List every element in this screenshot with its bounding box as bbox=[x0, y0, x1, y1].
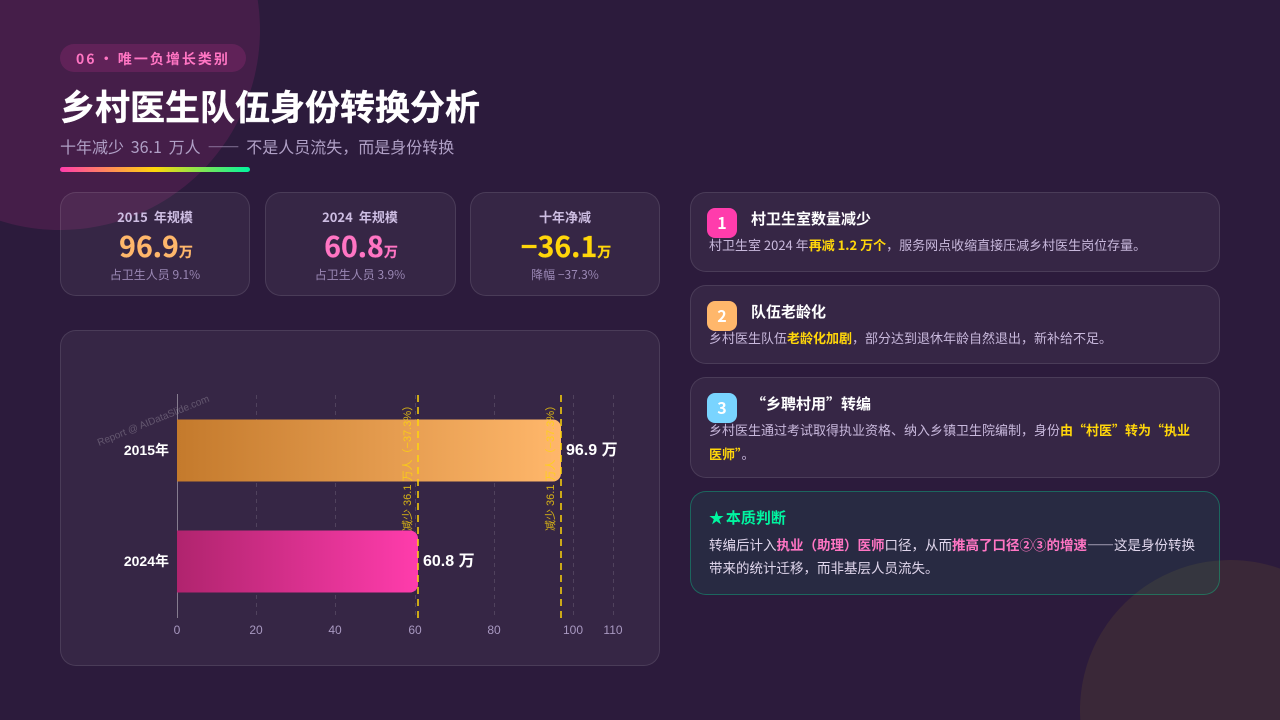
category labels bbox=[124, 442, 169, 569]
x axis labels: 110 bbox=[603, 623, 623, 637]
text 2: 乡村医生队伍老龄化加剧，部分达到退休年龄自然退出，新补给不足。 bbox=[709, 328, 1112, 347]
stat card: 2024: 2024 年规模 bbox=[322, 207, 398, 226]
x axis labels: 100 bbox=[563, 623, 583, 637]
x axis labels: 0 bbox=[174, 623, 181, 637]
callout heading: ★ 本质判断 bbox=[709, 507, 786, 528]
bar: 2015 bbox=[177, 420, 561, 482]
category labels: 2015年 bbox=[124, 442, 169, 458]
panel: reason 1 bbox=[690, 192, 1220, 272]
reference label right: 减少 36.1 万人（−37.3%） bbox=[544, 400, 557, 531]
title: 乡村医生队伍身份转换分析 bbox=[60, 80, 480, 131]
badge 2: 2 bbox=[717, 303, 727, 327]
panel: essence callout bbox=[690, 491, 1220, 595]
panel: reason 2 bbox=[690, 285, 1220, 364]
x axis labels: 60 bbox=[408, 623, 422, 637]
value labels bbox=[423, 442, 618, 570]
x axis labels: 80 bbox=[487, 623, 501, 637]
stat card: 2015: 2015 年规模 bbox=[117, 207, 193, 226]
text 1: 村卫生室 2024 年再减 1.2 万个，服务网点收缩直接压减乡村医生岗位存量。 bbox=[709, 235, 1146, 254]
x axis labels: 20 bbox=[249, 623, 263, 637]
heading 1: 村卫生室数量减少 bbox=[751, 208, 871, 229]
x axis labels: 40 bbox=[328, 623, 342, 637]
stat card: net decrease: 十年净减 bbox=[539, 207, 591, 226]
reference line: 60.8 bbox=[417, 395, 419, 618]
stat card: 2015: 占卫生人员 9.1% bbox=[110, 266, 200, 283]
value labels: 60.8 万 bbox=[423, 553, 475, 570]
stat card: net decrease: −36.1万 bbox=[521, 225, 611, 266]
stat card: 2015 bbox=[60, 192, 250, 296]
badge 1 bbox=[707, 208, 737, 238]
x axis labels bbox=[174, 623, 623, 637]
section tag bbox=[60, 44, 246, 72]
stat card: net decrease bbox=[470, 192, 660, 296]
reference label left: 减少 36.1 万人（−37.3%） bbox=[401, 400, 414, 531]
watermark: Report @ AIDataSlide.com bbox=[96, 394, 211, 449]
heading 2: 队伍老龄化 bbox=[751, 301, 826, 322]
section tag: 06 · 唯一负增长类别 bbox=[76, 49, 230, 69]
panel: bar chart bbox=[60, 330, 660, 666]
subtitle: 十年减少 36.1 万人 —— 不是人员流失，而是身份转换 bbox=[60, 134, 454, 158]
stat card: 2024: 60.8万 bbox=[324, 225, 398, 266]
text 3: 乡村医生通过考试取得执业资格、纳入乡镇卫生院编制，身份由“村医”转为“执业医师”。 bbox=[709, 420, 1190, 463]
callout text: 转编后计入执业（助理）医师口径，从而推高了口径②③的增速——这是身份转换带来的统计迁移，而非基层人员流失。 bbox=[709, 534, 1195, 577]
stat card: net decrease: 降幅 −37.3% bbox=[531, 266, 599, 283]
badge 1: 1 bbox=[717, 210, 727, 234]
bar chart bbox=[96, 394, 623, 637]
bar: 2024 bbox=[177, 530, 418, 592]
stat card: 2015: 96.9万 bbox=[119, 225, 193, 266]
panel: reason 3 bbox=[690, 377, 1220, 478]
gradient rule bbox=[60, 167, 250, 172]
stat card: 2024: 占卫生人员 3.9% bbox=[315, 266, 405, 283]
badge 3: 3 bbox=[717, 395, 727, 419]
badge 2 bbox=[707, 301, 737, 331]
stat card: 2024 bbox=[264, 192, 456, 296]
heading 3: “乡聘村用”转编 bbox=[751, 393, 871, 414]
y axis bbox=[176, 394, 178, 618]
value labels: 96.9 万 bbox=[566, 442, 618, 459]
badge 3 bbox=[707, 393, 737, 423]
reference line: 96.9 bbox=[560, 395, 562, 618]
category labels: 2024年 bbox=[124, 553, 169, 569]
